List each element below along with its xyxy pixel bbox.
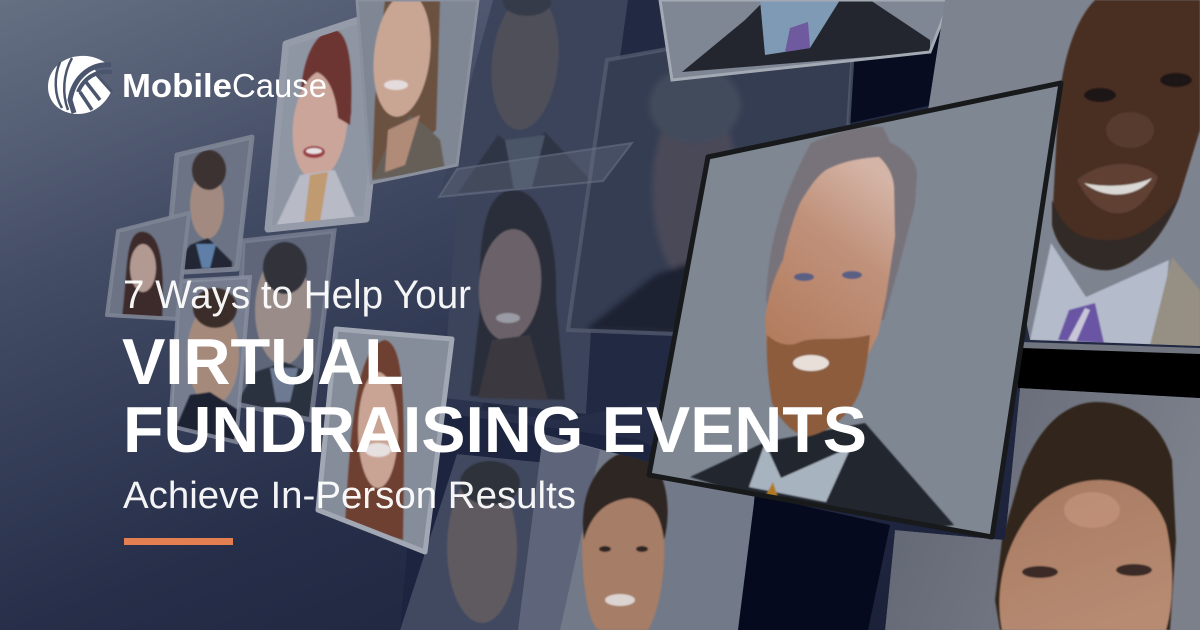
photo: centre dark woman [447, 188, 591, 414]
orange accent bar [124, 538, 233, 545]
frame: brown hair woman [357, 0, 478, 183]
photo: centre-left man [236, 231, 334, 420]
black band right [1018, 342, 1200, 398]
dark navy rear panel right of centre [480, 0, 950, 420]
frame: front-left man [170, 277, 250, 442]
dark rear panel lower centre [400, 410, 760, 630]
frame: small woman [107, 213, 189, 319]
logo icon: striped globe [48, 56, 112, 114]
photo: black man top right [928, 0, 1200, 347]
frame: long hair woman [318, 329, 452, 552]
navy panel bottom centre [738, 495, 890, 630]
logo wordmark: Mobile: Mobile [122, 67, 232, 104]
photo: small man [174, 140, 249, 270]
panel frame outline: right ghost panel [568, 15, 855, 340]
frame: red hair woman [268, 10, 389, 229]
logo [48, 56, 327, 114]
photo: top dark man [458, 0, 628, 193]
photo: brown hair woman [357, 0, 478, 183]
translucent horizontal plate [439, 143, 632, 197]
photo: ghost panel right with man [580, 52, 852, 332]
photo: long hair woman [318, 329, 452, 552]
subheading: Achieve In-Person Results [123, 475, 576, 517]
heading line 1: 7 Ways to Help Your [123, 273, 471, 317]
heading main: FUNDRAISING EVENTS: FUNDRAISING EVENTS [123, 393, 867, 466]
photo: red hair woman [272, 24, 368, 225]
frame: main man [649, 83, 1061, 537]
photo: woman bottom right [885, 388, 1200, 630]
photo: top centre man [660, 0, 950, 80]
logo wordmark: Cause: Cause [232, 67, 327, 104]
photo: front-left man [170, 277, 250, 442]
frame: centre-left man [236, 231, 334, 420]
photo: small woman [109, 219, 182, 317]
heading main: VIRTUAL: VIRTUAL [122, 325, 404, 398]
frame: small man [166, 137, 252, 273]
photo: dark man bottom centre [400, 454, 540, 630]
frame: top centre man [660, 0, 950, 80]
photo: young man bottom [518, 434, 755, 630]
photo: main man in dark frame [649, 83, 1061, 537]
navy panel top right [828, 0, 948, 128]
